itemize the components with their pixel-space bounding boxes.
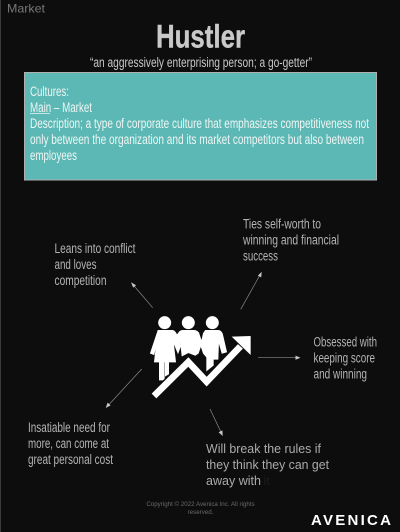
text: ties self-worth: success xyxy=(243,248,278,264)
arrow: to insatiable need xyxy=(106,369,142,408)
subtitle quote: “an aggressively enterprising person; a go-getter” xyxy=(90,55,312,70)
text: insatiable need: more, can come at xyxy=(28,436,109,451)
copyright notice: Copyright © 2022 Avenica Inc. All rights xyxy=(146,501,255,508)
text: insatiable need xyxy=(28,420,113,467)
text: will break the rules: they think they can get xyxy=(206,457,329,472)
text: leans into conflict xyxy=(54,241,136,288)
copyright notice: reserved. xyxy=(188,509,214,516)
arrow: to ties self-worth xyxy=(241,272,262,309)
main culture line: Main – Market xyxy=(30,100,92,115)
figure: man xyxy=(201,316,227,371)
figure: middle person xyxy=(177,316,202,356)
arrow: to leans into conflict xyxy=(131,282,153,308)
description text: employees xyxy=(30,148,77,163)
section label: Market: Market xyxy=(7,2,46,16)
text: ties self-worth: Ties self-worth to xyxy=(243,216,321,232)
text: will break the rules xyxy=(206,441,329,488)
text: obsessed with score: keeping score xyxy=(314,350,375,366)
text: will break the rules: it xyxy=(264,473,270,488)
figure: woman xyxy=(150,316,181,380)
text: will break the rules: away with xyxy=(206,473,261,488)
text: obsessed with score: Obsessed with xyxy=(314,334,377,350)
description text xyxy=(30,116,369,163)
text: ties self-worth xyxy=(242,216,339,264)
text: ties self-worth: winning and financial xyxy=(242,232,339,248)
cultures heading: Cultures: xyxy=(30,84,69,99)
text: obsessed with score xyxy=(314,334,377,382)
text: leans into conflict: Leans into conflict xyxy=(54,241,136,256)
logo: Avenica: AVENICA xyxy=(311,512,391,529)
text: obsessed with score: and winning xyxy=(314,366,367,382)
text: insatiable need: Insatiable need for xyxy=(28,420,110,435)
copyright notice xyxy=(146,501,255,516)
title: Hustler xyxy=(156,18,245,54)
icon: three people with rising arrow xyxy=(150,316,251,396)
text: insatiable need: great personal cost xyxy=(28,452,113,467)
text: will break the rules: Will break the rules if xyxy=(206,441,321,456)
icon: rising arrow xyxy=(154,335,251,396)
arrow: to obsessed with score xyxy=(258,356,300,360)
text: leans into conflict: and loves xyxy=(54,257,97,272)
text: leans into conflict: competition xyxy=(54,273,106,288)
panel: cultures description xyxy=(24,72,376,180)
arrow: to will break the rules xyxy=(210,409,223,436)
